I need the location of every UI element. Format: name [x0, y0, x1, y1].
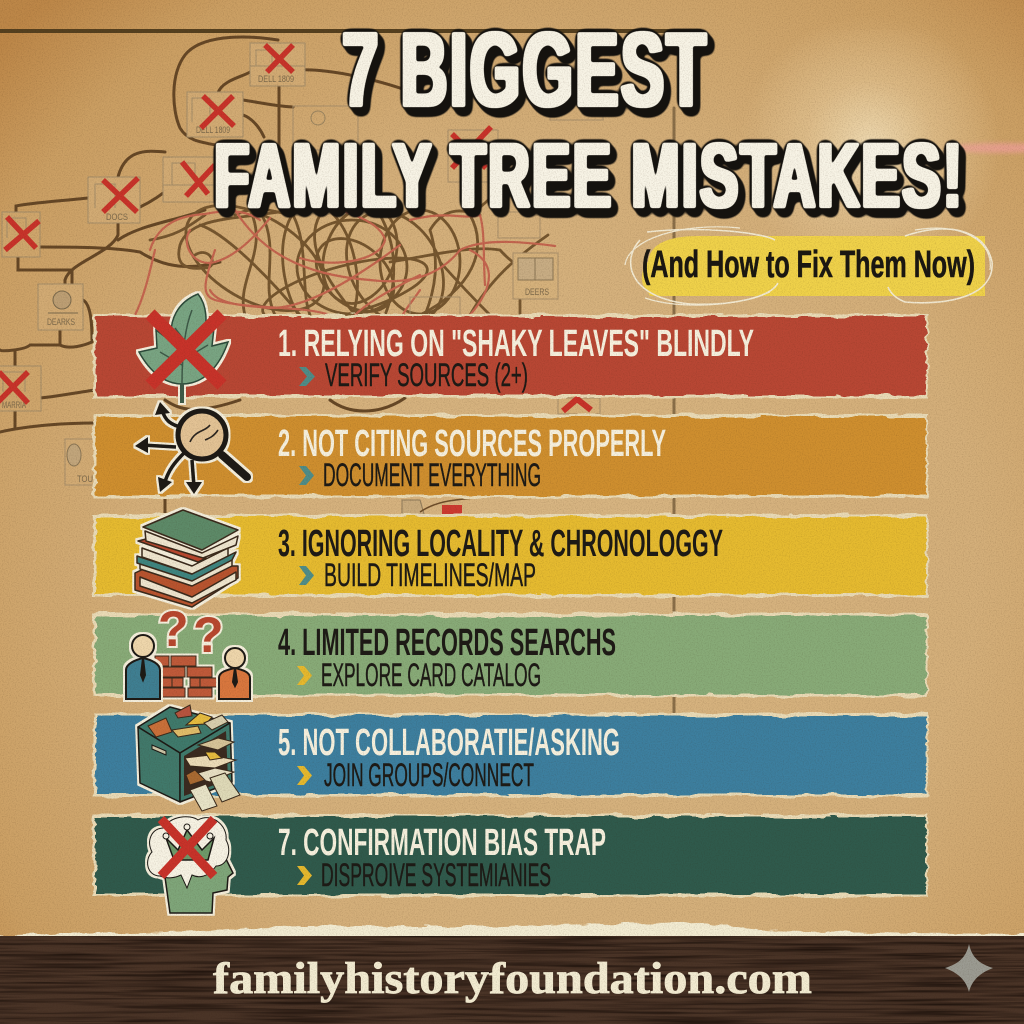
box: right of title: [498, 212, 540, 238]
box: second ancestor: [187, 92, 243, 137]
box: behind title center: [293, 106, 358, 150]
box: sketch portrait: TOU: [77, 474, 93, 484]
box: third ancestor: [163, 157, 215, 202]
website address: familyhistoryfoundation.com: [213, 954, 812, 1003]
cabinet handle: [152, 745, 166, 755]
ancestor boxes with red crosses: [0, 43, 603, 515]
box: lower left ancestor: MARRIA: [2, 400, 26, 410]
box: second ancestor: DELL 1809: [196, 125, 230, 135]
question marks: ?: [193, 607, 224, 663]
question marks: [158, 601, 224, 663]
band 4: records: 4. LIMITED RECORDS SEARCHS: [278, 622, 616, 664]
box: portrait: DEARKS: [47, 317, 75, 327]
icon: sparkle: [945, 944, 993, 992]
head silhouette: [160, 853, 233, 913]
footer torn paper edge: [0, 922, 1024, 942]
tree connector lines: [0, 31, 700, 712]
box: sketch portrait: [65, 439, 95, 485]
tangled family tree background: [0, 31, 700, 712]
band 3: locality: [93, 514, 928, 597]
band 2: citing sources: [93, 414, 928, 498]
box: top ancestor: DELL 1809: [258, 74, 294, 84]
icon: crossed out leaf: [139, 294, 228, 403]
band 5: collaborate: [93, 713, 928, 797]
scattered papers: [148, 705, 240, 811]
box: docs: DOCS: [106, 212, 128, 222]
icon: people and brick wall: [126, 601, 250, 699]
footer wood bar: [0, 936, 1024, 1024]
box: left ancestor: [2, 212, 40, 257]
question marks: ?: [158, 601, 189, 657]
glow overlay: [760, 30, 1000, 260]
band 3: locality: BUILD TIMELINES/MAP: [324, 557, 536, 593]
box: upper right: [550, 100, 603, 120]
icon: magnifier with arrows: [135, 402, 247, 494]
box: docs: [88, 177, 140, 223]
icon: stack of books: [135, 510, 238, 607]
box: behind title with cross: [448, 127, 498, 182]
person right: [219, 648, 250, 699]
icon: head with crossed crown: [148, 817, 233, 913]
band 1: shaky leaves: [93, 314, 928, 398]
icon: overflowing file cabinet: [138, 705, 240, 811]
band 6: confirmation bias: 7. CONFIRMATION BIAS TRAP: [278, 822, 606, 864]
band 4: records: EXPLORE CARD CATALOG: [321, 657, 541, 693]
box: deers: [513, 253, 558, 299]
band 6: confirmation bias: [93, 814, 928, 897]
thought cloud: [148, 817, 229, 888]
box: lower left ancestor: [0, 366, 41, 411]
band 5: collaborate: JOIN GROUPS/CONNECT: [324, 757, 534, 793]
scribble knot brown: [150, 180, 548, 343]
band 1: shaky leaves: VERIFY SOURCES (2+): [325, 357, 528, 393]
box: lower center: [410, 297, 460, 315]
band 5: collaborate: 5. NOT COLLABORATIE/ASKING: [278, 722, 620, 764]
box: portrait: [38, 284, 83, 330]
brick wall: [155, 656, 217, 697]
scribble knot red: [135, 200, 555, 320]
box: between bands: [558, 398, 600, 414]
band 2: citing sources: 2. NOT CITING SOURCES PROPERLY: [278, 423, 666, 465]
box: deers: DEERS: [525, 287, 549, 297]
band 4: records: [93, 613, 928, 697]
subtitle badge: [625, 227, 992, 305]
band 6: confirmation bias: DISPROIVE SYSTEMIANIES: [321, 857, 551, 893]
band 2: citing sources: DOCUMENT EVERYTHING: [323, 457, 541, 493]
crown: [163, 824, 214, 860]
mistake bands: [93, 314, 928, 897]
title line one: 7 BIGGEST: [342, 11, 708, 129]
box: top ancestor: [250, 43, 305, 86]
box: sketch under band two: [402, 498, 475, 515]
person left: [126, 635, 160, 699]
